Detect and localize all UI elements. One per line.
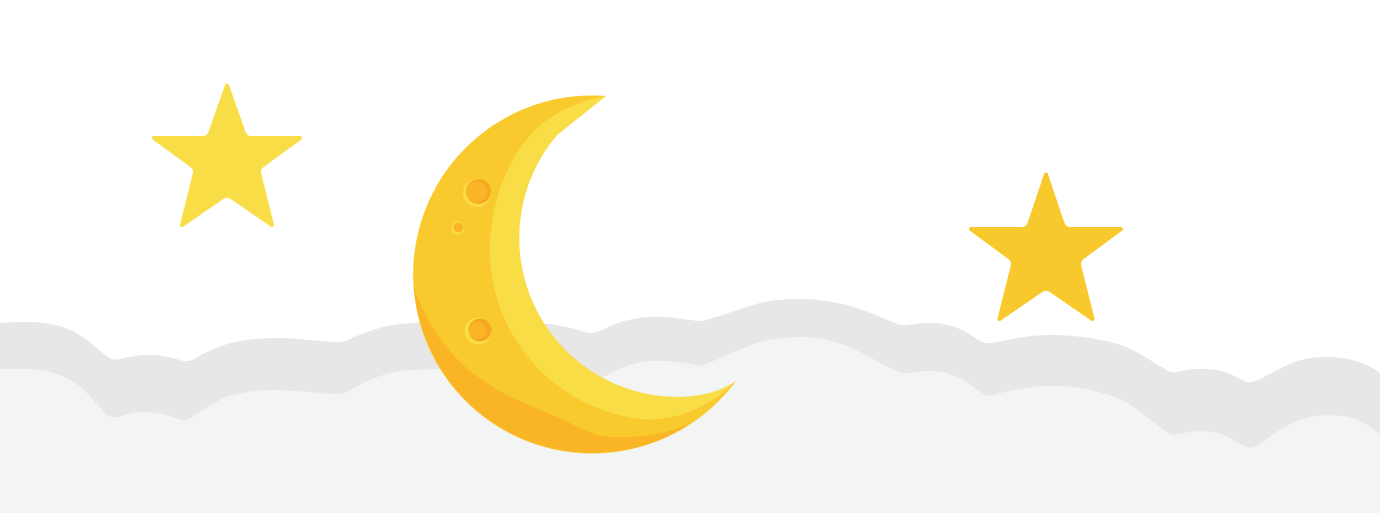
crater: lower bbox=[464, 318, 492, 344]
moon body bbox=[413, 95, 736, 453]
icon: left star bbox=[154, 86, 300, 225]
crater: small bbox=[452, 222, 464, 234]
back cloud layer bbox=[0, 299, 1380, 513]
moon inner highlight bbox=[490, 96, 736, 420]
crater: upper bbox=[463, 179, 491, 207]
front cloud layer bbox=[0, 337, 1380, 513]
moon lower shadow bbox=[414, 287, 690, 453]
icon: crescent moon bbox=[413, 95, 736, 453]
icon: right star bbox=[971, 174, 1121, 319]
